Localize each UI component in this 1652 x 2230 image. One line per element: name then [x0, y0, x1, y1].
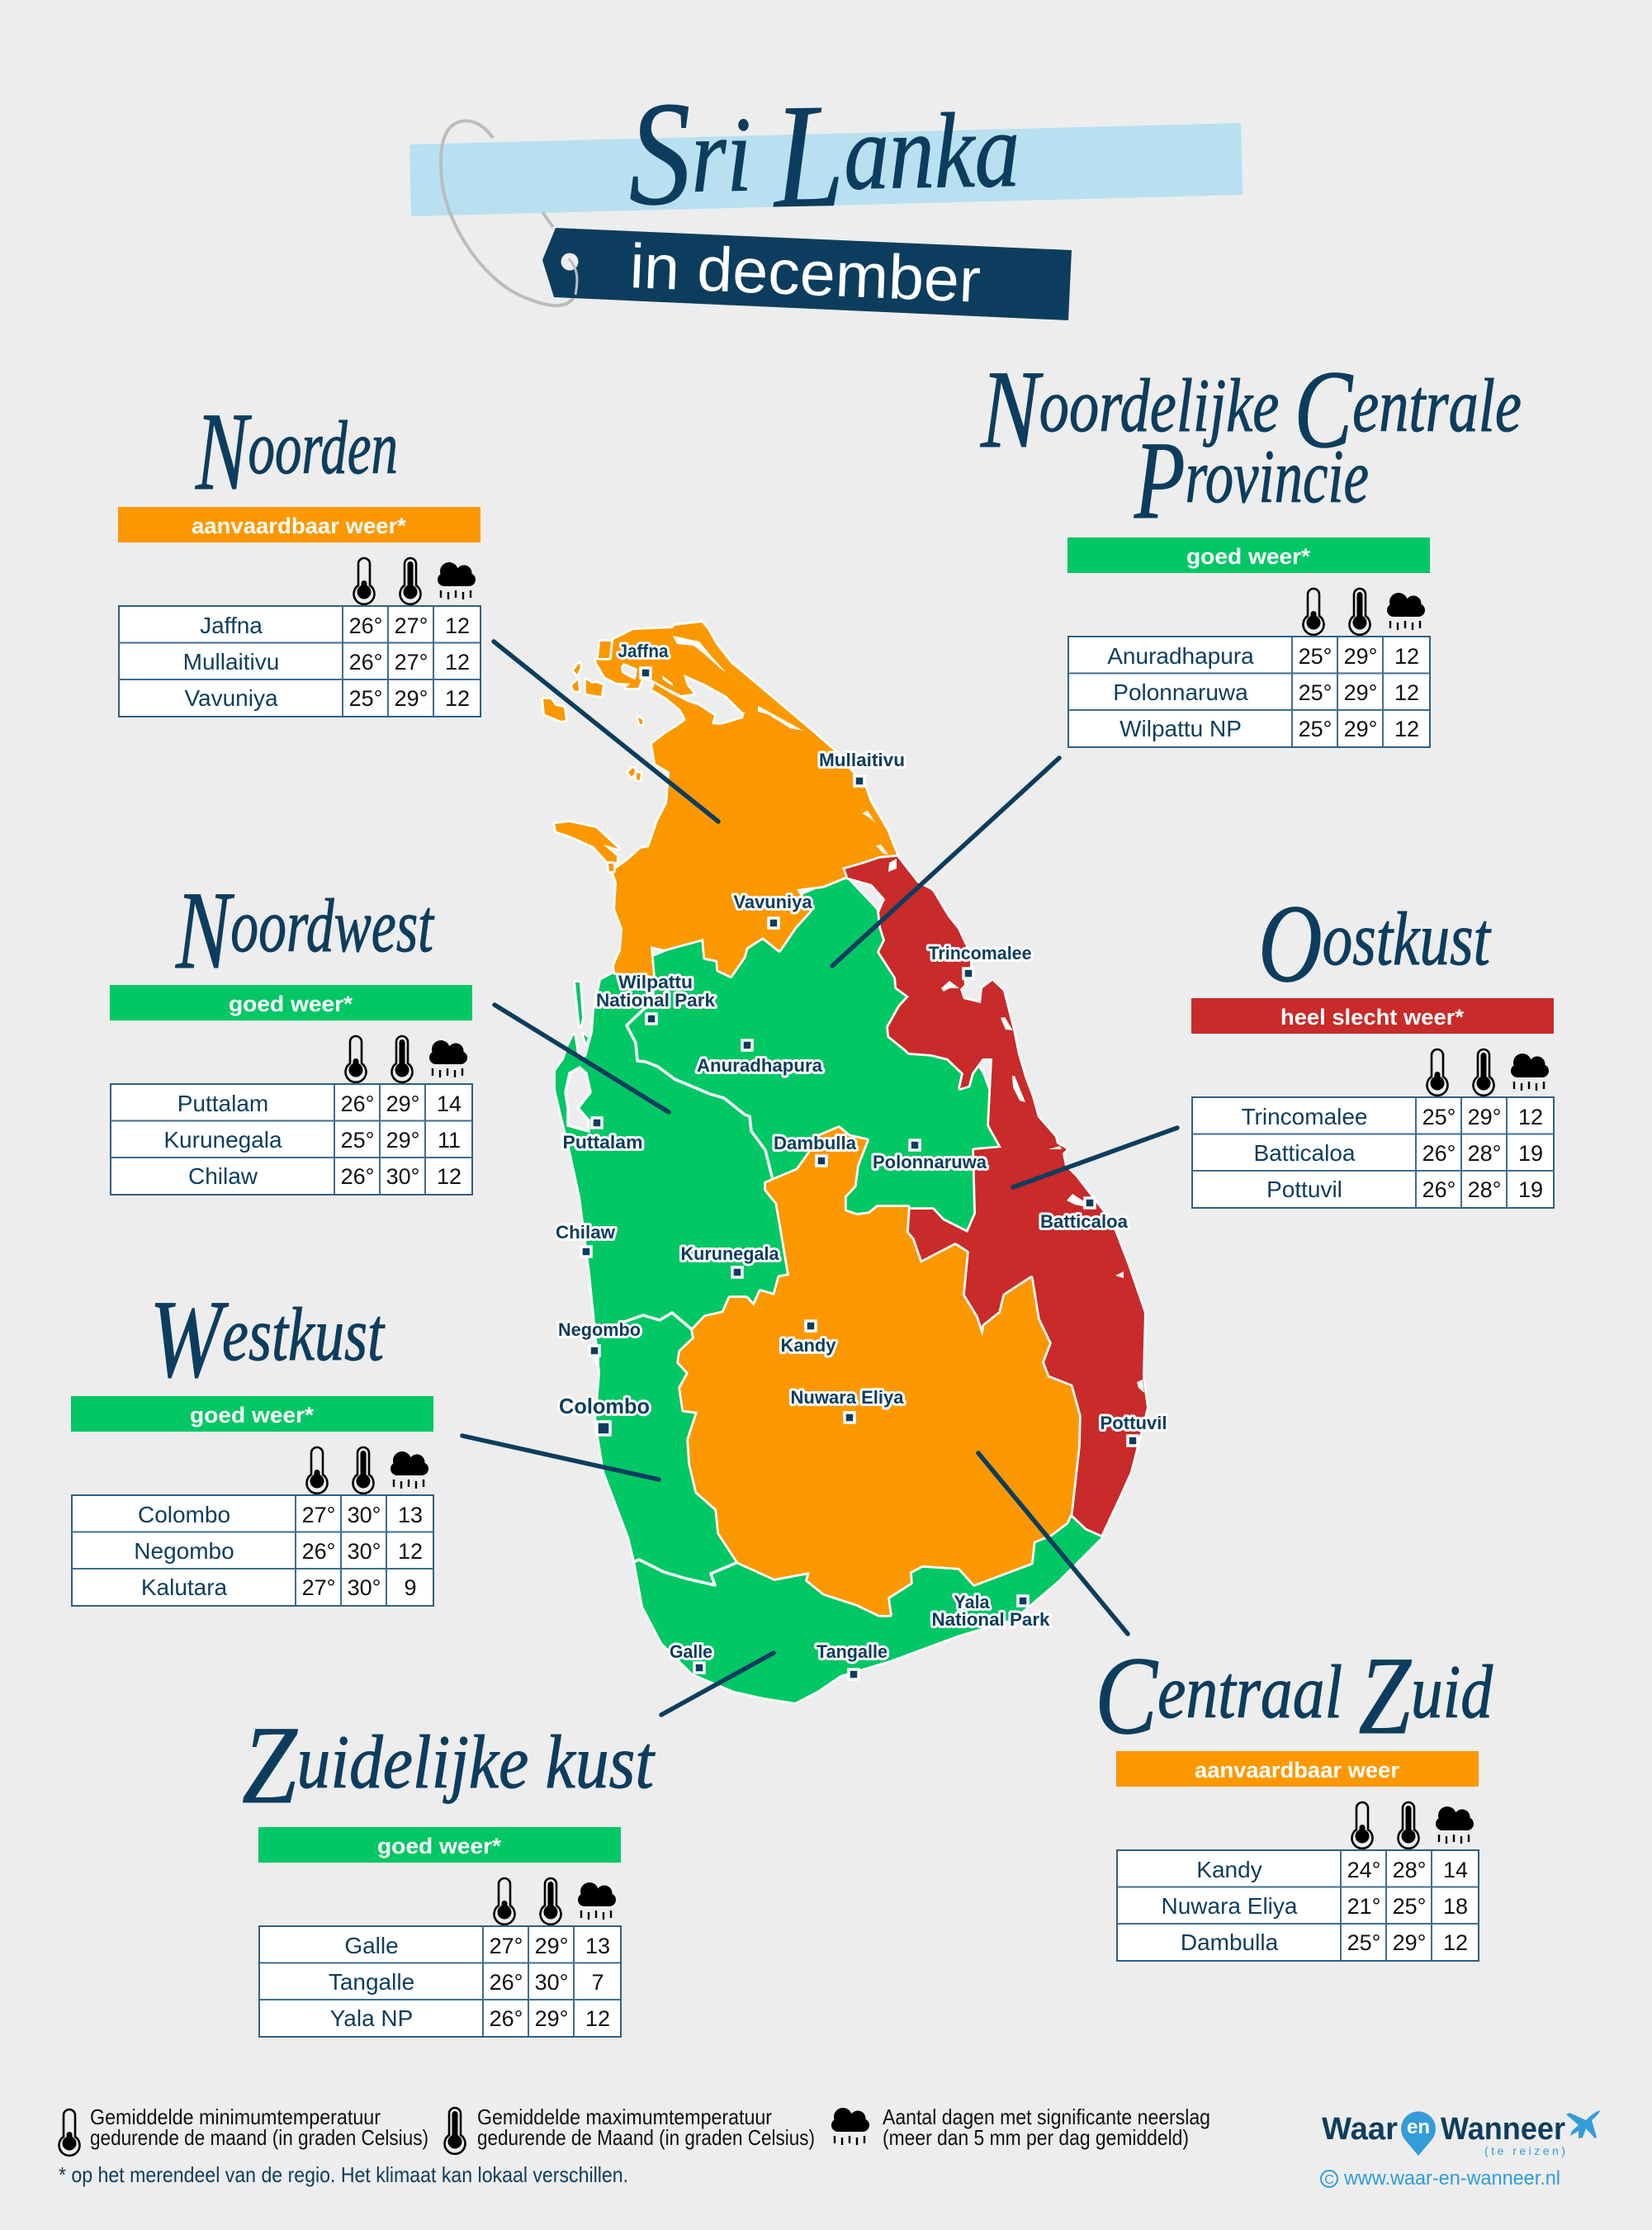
heading: Centraal Zuid: entraal	[1157, 1650, 1359, 1734]
map of Sri Lanka	[462, 623, 1177, 1715]
climate table: 28°	[1468, 1177, 1501, 1202]
panel: Noordelijke Centrale Provincie	[1067, 537, 1430, 747]
climate table: Chilaw	[188, 1163, 258, 1189]
region dividers	[599, 976, 772, 1585]
city labels	[556, 641, 1167, 1662]
heading: Noordwest: N	[175, 869, 234, 992]
icon: max temperature	[400, 558, 421, 604]
climate table: 29°	[395, 686, 428, 711]
city labels: Galle	[670, 1641, 712, 1662]
climate table: Jaffna	[200, 613, 263, 638]
heading: Oostkust: ostkust	[1323, 897, 1492, 981]
city labels: Negombo	[558, 1319, 641, 1340]
logo word: Waar: Waar	[1322, 2112, 1398, 2147]
climate table: 25°	[1393, 1894, 1426, 1919]
climate table: 29°	[1468, 1105, 1501, 1129]
city labels: Mullaitivu	[819, 750, 905, 770]
status banner	[118, 507, 480, 542]
climate table: 26°	[490, 2006, 523, 2031]
climate table: 26°	[302, 1539, 335, 1564]
icon: rain cloud	[391, 1451, 428, 1489]
status banner	[110, 985, 472, 1020]
legend text: min temperature: Gemiddelde minimumtemperatuur	[90, 2105, 381, 2129]
legend	[59, 2105, 1210, 2187]
city labels: Pottuvil	[1100, 1413, 1167, 1433]
heading: Noordwest: oordwest	[230, 883, 435, 968]
climate table: 24°	[1347, 1858, 1380, 1882]
city labels: Colombo	[559, 1394, 650, 1418]
heading: Noordelijke Centrale Provincie: N	[980, 348, 1044, 471]
climate table: 30°	[386, 1164, 419, 1189]
city labels: Anuradhapura	[697, 1055, 823, 1076]
icon: map pin	[1401, 2111, 1436, 2156]
climate table: Wilpattu NP	[1119, 716, 1242, 741]
copyright and website: C	[1324, 2173, 1334, 2187]
panel: Centraal Zuid	[1116, 1751, 1479, 1961]
climate table: 12	[1394, 717, 1419, 741]
title: L	[770, 73, 845, 239]
heading: Centraal Zuid: Z	[1359, 1635, 1412, 1758]
icon: min temperature	[345, 1036, 367, 1082]
city markers	[581, 668, 1138, 1679]
heading: Noordelijke Centrale Provincie: rovincie	[1186, 434, 1369, 518]
panel: Oostkust	[1191, 998, 1554, 1208]
climate table: Batticaloa	[1254, 1140, 1356, 1166]
climate table	[111, 1084, 472, 1195]
icon: min temperature	[353, 558, 375, 604]
climate table: 28°	[1468, 1141, 1501, 1166]
climate table	[1068, 637, 1430, 747]
panel: Westkust	[71, 1396, 433, 1606]
icon: legend max temperature	[444, 2108, 466, 2154]
tag	[542, 228, 1072, 320]
heading: Noordelijke Centrale Provincie: oordelijke	[1039, 363, 1294, 447]
footnote: * op het merendeel van de regio. Het klimaat kan lokaal verschillen.	[59, 2162, 628, 2187]
city labels: Wilpattu	[618, 972, 693, 992]
panel: Zuidelijke kust	[258, 1827, 621, 2037]
climate table: 29°	[535, 2006, 568, 2031]
climate table: 27°	[490, 1934, 523, 1958]
city labels: Dambulla	[774, 1133, 857, 1153]
city labels: Nuwara Eliya	[791, 1387, 904, 1408]
climate table: 26°	[341, 1091, 374, 1116]
climate table: 29°	[535, 1934, 568, 1958]
tag hole	[561, 253, 578, 271]
icon: rain cloud	[578, 1882, 616, 1920]
logo: Waar en Wanneer	[1321, 2110, 1600, 2190]
heading: Centraal Zuid: uid	[1411, 1650, 1493, 1734]
climate table: Kurunegala	[163, 1127, 282, 1153]
climate table	[119, 606, 480, 717]
climate table: 30°	[535, 1970, 568, 1995]
climate table: 26°	[1422, 1177, 1456, 1202]
heading: Noorden: oorden	[249, 405, 398, 490]
leader lines	[462, 642, 1177, 1715]
icon: min temperature	[1303, 589, 1324, 635]
subtitle: in december	[628, 231, 982, 316]
climate table: Dambulla	[1181, 1929, 1279, 1955]
climate table: 12	[1394, 644, 1419, 669]
icon: min temperature	[307, 1447, 327, 1494]
status banner	[1067, 537, 1430, 573]
climate table: Colombo	[138, 1502, 230, 1527]
status banner: goed weer*	[190, 1403, 315, 1427]
icon: max temperature	[353, 1447, 373, 1494]
lagoon: Negombo	[590, 1354, 599, 1371]
climate table: 27°	[395, 650, 428, 675]
legend text: max temperature: Gemiddelde maximumtemperatuur	[477, 2105, 772, 2129]
climate table: 29°	[1393, 1930, 1426, 1955]
status banner: goed weer*	[229, 992, 353, 1016]
status banner	[1191, 998, 1554, 1034]
climate table: 30°	[348, 1539, 381, 1564]
climate table: 11	[438, 1128, 461, 1153]
status banner	[71, 1396, 433, 1432]
icon: map pin: en	[1407, 2116, 1430, 2138]
climate table: 30°	[348, 1575, 381, 1600]
icon: max temperature	[1473, 1049, 1494, 1096]
climate table: Galle	[344, 1933, 399, 1958]
heading: Noordelijke Centrale Provincie: P	[1134, 419, 1186, 542]
legend text: max temperature	[477, 2105, 815, 2150]
status banner: goed weer*	[377, 1834, 502, 1858]
icon: legend min temperature	[59, 2109, 79, 2156]
legend text: rain	[883, 2105, 1210, 2150]
city labels: Batticaloa	[1040, 1211, 1129, 1232]
climate table: Yala NP	[330, 2005, 413, 2031]
climate table: 13	[585, 1934, 610, 1958]
climate table: 26°	[1422, 1141, 1456, 1166]
climate table: Nuwara Eliya	[1162, 1893, 1298, 1919]
city labels: Tangalle	[817, 1641, 888, 1662]
heading: Oostkust: O	[1258, 883, 1323, 1006]
climate table: 19	[1518, 1141, 1543, 1166]
climate table: 12	[445, 650, 470, 675]
status banner: goed weer*	[1186, 544, 1311, 569]
copyright and website: www.waar-en-wanneer.nl	[1343, 2167, 1560, 2190]
icon: rain cloud	[1511, 1053, 1549, 1091]
climate table: 29°	[386, 1128, 419, 1153]
legend text: max temperature: gedurende de Maand (in graden Celsius)	[477, 2125, 815, 2150]
icon: max temperature	[1349, 589, 1370, 635]
climate table: 25°	[1299, 644, 1332, 669]
climate table: 25°	[1347, 1930, 1380, 1955]
climate table: 21°	[1347, 1894, 1380, 1919]
islet: green small	[584, 1035, 588, 1043]
status banner	[258, 1827, 621, 1863]
climate table: 9	[404, 1575, 417, 1600]
legend text: rain: (meer dan 5 mm per dag gemiddeld)	[883, 2125, 1189, 2150]
city labels: Yala	[954, 1592, 990, 1612]
icon: max temperature	[540, 1878, 561, 1925]
climate table: Kandy	[1196, 1857, 1262, 1882]
icon: min temperature	[1352, 1802, 1372, 1849]
climate table: 29°	[1344, 717, 1377, 741]
tag string	[441, 121, 577, 305]
icon: legend rain cloud	[831, 2108, 869, 2145]
climate table: 12	[1394, 680, 1419, 705]
climate table: 26°	[349, 613, 382, 638]
heading: Noordelijke Centrale Provincie	[980, 348, 1522, 542]
climate table: Negombo	[134, 1538, 234, 1564]
legend text: min temperature: gedurende de maand (in graden Celsius)	[90, 2125, 428, 2150]
heading: Centraal Zuid: C	[1095, 1635, 1159, 1758]
heading: Noordelijke Centrale Provincie: C	[1294, 348, 1354, 471]
title: ri	[690, 95, 775, 215]
city labels: National Park	[931, 1609, 1050, 1630]
climate table: 26°	[349, 650, 382, 675]
climate table: 7	[591, 1970, 604, 1995]
heading: Zuidelijke kust: Z	[242, 1704, 298, 1827]
climate table: 27°	[302, 1503, 335, 1527]
climate table	[1192, 1097, 1554, 1208]
climate table: 13	[398, 1503, 423, 1527]
status banner: heel slecht weer*	[1280, 1005, 1464, 1030]
climate table: 30°	[348, 1503, 381, 1527]
status banner: aanvaardbaar weer	[1195, 1758, 1399, 1783]
status banner	[1116, 1751, 1479, 1787]
climate table: 12	[1443, 1930, 1468, 1955]
city labels: National Park	[596, 990, 716, 1011]
climate table: 25°	[1422, 1105, 1456, 1129]
heading: Westkust: estkust	[222, 1292, 386, 1376]
climate table	[1117, 1850, 1479, 1961]
logo word: Wanneer: Wanneer	[1441, 2112, 1565, 2147]
climate table: 25°	[1299, 680, 1332, 705]
red region white lagoons	[888, 859, 1144, 1393]
climate table: Polonnaruwa	[1113, 679, 1248, 705]
city labels: Polonnaruwa	[873, 1152, 987, 1172]
climate table: 19	[1518, 1177, 1543, 1202]
climate table	[259, 1926, 621, 2037]
icon: min temperature	[494, 1878, 515, 1925]
icon: rain cloud	[1436, 1806, 1474, 1844]
heading: Zuidelijke kust: uidelijke kust	[297, 1720, 656, 1804]
climate table: Anuradhapura	[1107, 643, 1254, 669]
climate table: Puttalam	[178, 1091, 268, 1116]
climate table: 12	[1518, 1105, 1543, 1129]
tag string over hole	[569, 258, 577, 295]
heading: Westkust: W	[149, 1278, 229, 1401]
climate table: Kalutara	[141, 1574, 228, 1600]
heading: Noordelijke Centrale Provincie: entrale	[1352, 363, 1522, 447]
icon: min temperature	[1427, 1049, 1448, 1096]
climate table: Trincomalee	[1241, 1104, 1368, 1129]
region: red east coast	[842, 856, 1147, 1535]
climate table: 26°	[341, 1164, 374, 1189]
region: north orange	[596, 623, 897, 976]
climate table: Vavuniya	[184, 685, 278, 711]
status banner: aanvaardbaar weer*	[192, 514, 407, 538]
title: anka	[843, 91, 1020, 212]
northern white slivers	[662, 636, 888, 855]
city labels: Kandy	[781, 1335, 836, 1356]
climate table	[72, 1495, 433, 1606]
climate table: 27°	[395, 613, 428, 638]
legend text: min temperature	[90, 2105, 428, 2150]
climate table: 14	[437, 1091, 462, 1116]
climate table: Tangalle	[329, 1969, 414, 1995]
climate table: 14	[1443, 1858, 1468, 1882]
legend text: rain: Aantal dagen met significante neerslag	[883, 2105, 1210, 2129]
climate table: 12	[398, 1539, 423, 1564]
icon: max temperature	[1399, 1802, 1418, 1849]
city labels: Puttalam	[563, 1132, 642, 1153]
title: S	[627, 71, 693, 236]
panel: Noordwest	[110, 985, 472, 1195]
climate table: 12	[445, 613, 470, 638]
climate table: Pottuvil	[1266, 1177, 1342, 1202]
lagoon: Puttalam	[566, 1068, 590, 1131]
icon: rain cloud	[1387, 593, 1425, 630]
climate table: 29°	[1344, 644, 1377, 669]
title block	[409, 65, 1243, 320]
climate table: 25°	[341, 1128, 374, 1153]
climate table: 26°	[490, 1970, 523, 1995]
climate table: 25°	[1299, 717, 1332, 741]
climate table: 28°	[1393, 1858, 1426, 1882]
city labels: Chilaw	[556, 1222, 616, 1243]
climate table: 27°	[302, 1575, 335, 1600]
islands: north	[543, 642, 642, 871]
climate table: 29°	[1344, 680, 1377, 705]
climate table: Mullaitivu	[183, 649, 279, 675]
city labels: Jaffna	[618, 641, 669, 661]
region: central south orange	[679, 1128, 1079, 1615]
islets: green	[575, 982, 582, 1026]
city labels: Trincomalee	[928, 943, 1032, 963]
icon: rain cloud	[429, 1040, 467, 1077]
climate table: 29°	[386, 1091, 419, 1116]
city labels: Kurunegala	[680, 1243, 779, 1264]
title band	[409, 123, 1243, 216]
climate table: 18	[1443, 1894, 1468, 1919]
icon: plane	[1566, 2110, 1600, 2138]
climate table: 12	[585, 2006, 610, 2031]
logo tagline: (te reizen)	[1484, 2144, 1565, 2157]
climate table: 25°	[349, 686, 382, 711]
city labels: Vavuniya	[733, 892, 812, 912]
icon: max temperature	[391, 1036, 413, 1082]
panel: Noorden	[118, 507, 480, 717]
region: green land	[556, 877, 1101, 1702]
icon: rain cloud	[438, 562, 476, 599]
heading: Noorden: N	[195, 391, 252, 514]
climate table: 12	[445, 686, 470, 711]
climate table: 12	[437, 1164, 462, 1189]
